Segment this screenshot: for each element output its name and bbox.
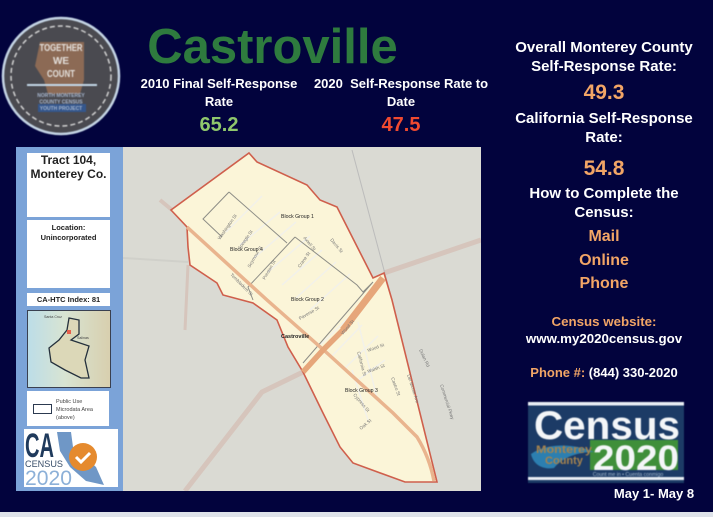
map: Castro St — [390, 377, 402, 397]
map: Wood St — [367, 342, 385, 353]
inset map: Santa Cruz — [44, 315, 62, 319]
2010 rate — [141, 76, 297, 136]
map: Wood St — [340, 318, 356, 336]
map: California St — [356, 351, 368, 377]
logo: Census 2020 Monterey County: County — [545, 455, 584, 467]
inset map: Salinas — [77, 336, 89, 340]
map labels: Block Group 2 — [291, 297, 324, 303]
California rate: California Self-Response — [515, 110, 693, 127]
logo: Together We Count: NORTH MONTEREY — [37, 93, 85, 99]
logo: Together We Count: COUNTY CENSUS — [39, 100, 83, 106]
map — [123, 147, 481, 491]
right column: response rates: Self-Response Rate: — [531, 58, 677, 75]
HTC index: CA-HTC Index: 81 — [37, 295, 100, 304]
logo: Together We Count: COUNT — [47, 69, 75, 80]
map: Speegle St — [237, 229, 254, 251]
how to complete: Mail — [588, 228, 620, 245]
how to complete: How to Complete the — [529, 185, 679, 202]
2020 rate: 2020 Self-Response Rate to — [314, 76, 488, 91]
census website: www.my2020census.gov — [526, 331, 682, 346]
2020 rate: 47.5 — [382, 114, 420, 136]
logo: Census 2020 Monterey County: Census — [534, 404, 680, 448]
California rate: Rate: — [585, 128, 623, 146]
map: Preston St — [262, 259, 277, 280]
2020 rate: Date — [387, 94, 415, 109]
logo: Together We Count: TOGETHER — [40, 43, 83, 54]
block groups — [203, 192, 373, 363]
map: Crane St — [297, 250, 312, 269]
census website — [526, 314, 682, 346]
tract name: Tract 104, — [41, 153, 96, 167]
2010 rate: 2010 Final Self-Response — [141, 76, 297, 91]
logo: CA Census 2020 — [24, 429, 118, 487]
location — [27, 220, 110, 288]
map labels: Block Group 3 — [345, 388, 378, 394]
map legend: Microdata Area — [56, 407, 93, 413]
map legend — [27, 391, 109, 426]
how to complete: Census: — [574, 204, 634, 220]
logo: CA Census 2020: CENSUS — [25, 459, 63, 469]
map: Commercial Pkwy — [439, 384, 455, 421]
map: Del Monte Ave — [406, 374, 420, 404]
HTC index — [27, 293, 110, 306]
logo: Census 2020 Monterey County — [527, 401, 685, 484]
tract name — [27, 153, 110, 217]
2020 rate — [314, 76, 488, 136]
highways — [187, 227, 434, 481]
California rate: 54.8 — [584, 157, 624, 180]
map labels: Block Group 4 — [230, 247, 263, 253]
right column: response rates — [515, 39, 693, 104]
inset map — [27, 310, 111, 388]
map: Axtell St — [302, 235, 317, 252]
location: Location: — [52, 223, 85, 232]
street grid — [226, 196, 385, 420]
map: Paverse St — [298, 305, 321, 321]
map: Cypress St — [352, 392, 371, 413]
map: Oak St — [358, 417, 373, 431]
2010 rate: Rate — [205, 94, 233, 109]
census website: Census website: — [552, 314, 656, 329]
map labels: Castroville — [281, 334, 309, 340]
location: Unincorporated — [41, 233, 96, 242]
map legend: Public Use — [56, 399, 82, 405]
logo: Census 2020 Monterey County: 2020 — [593, 439, 679, 478]
logo: Together We Count — [1, 16, 121, 136]
how to complete — [529, 185, 679, 292]
tract name: Monterey Co. — [30, 167, 106, 181]
how to complete: Phone — [580, 275, 628, 292]
California rate — [515, 110, 693, 180]
phone: Phone #: (844) 330-2020 — [530, 365, 678, 380]
panel: sidebar — [16, 147, 123, 491]
bottom edge — [0, 512, 713, 517]
map: Washington St — [217, 213, 238, 241]
map legend: (above) — [56, 415, 75, 421]
right column: response rates: Overall Monterey County — [515, 39, 693, 56]
map labels: Block Group 1 — [281, 214, 314, 220]
date range: May 1- May 8 — [614, 486, 694, 501]
map labels — [230, 214, 378, 394]
2010 rate: 65.2 — [200, 114, 238, 136]
map: Seymour St — [247, 245, 263, 268]
title: Castroville — [147, 20, 398, 74]
map: Walsh St — [367, 363, 386, 374]
logo: Together We Count: WE — [53, 56, 69, 67]
how to complete: Online — [579, 252, 629, 268]
logo: Census 2020 Monterey County: Monterey — [536, 444, 593, 456]
map: Tembladero St — [229, 272, 254, 297]
logo: Census 2020 Monterey County: Count me in • Cuenta conmigo — [593, 472, 663, 478]
logo: Together We Count: YOUTH PROJECT — [40, 106, 82, 112]
tract boundary — [171, 153, 437, 482]
roads outside tract — [123, 150, 481, 491]
map: Dolan Rd — [418, 348, 431, 368]
right column: response rates: 49.3 — [584, 81, 624, 104]
map: Davis St — [329, 237, 345, 254]
